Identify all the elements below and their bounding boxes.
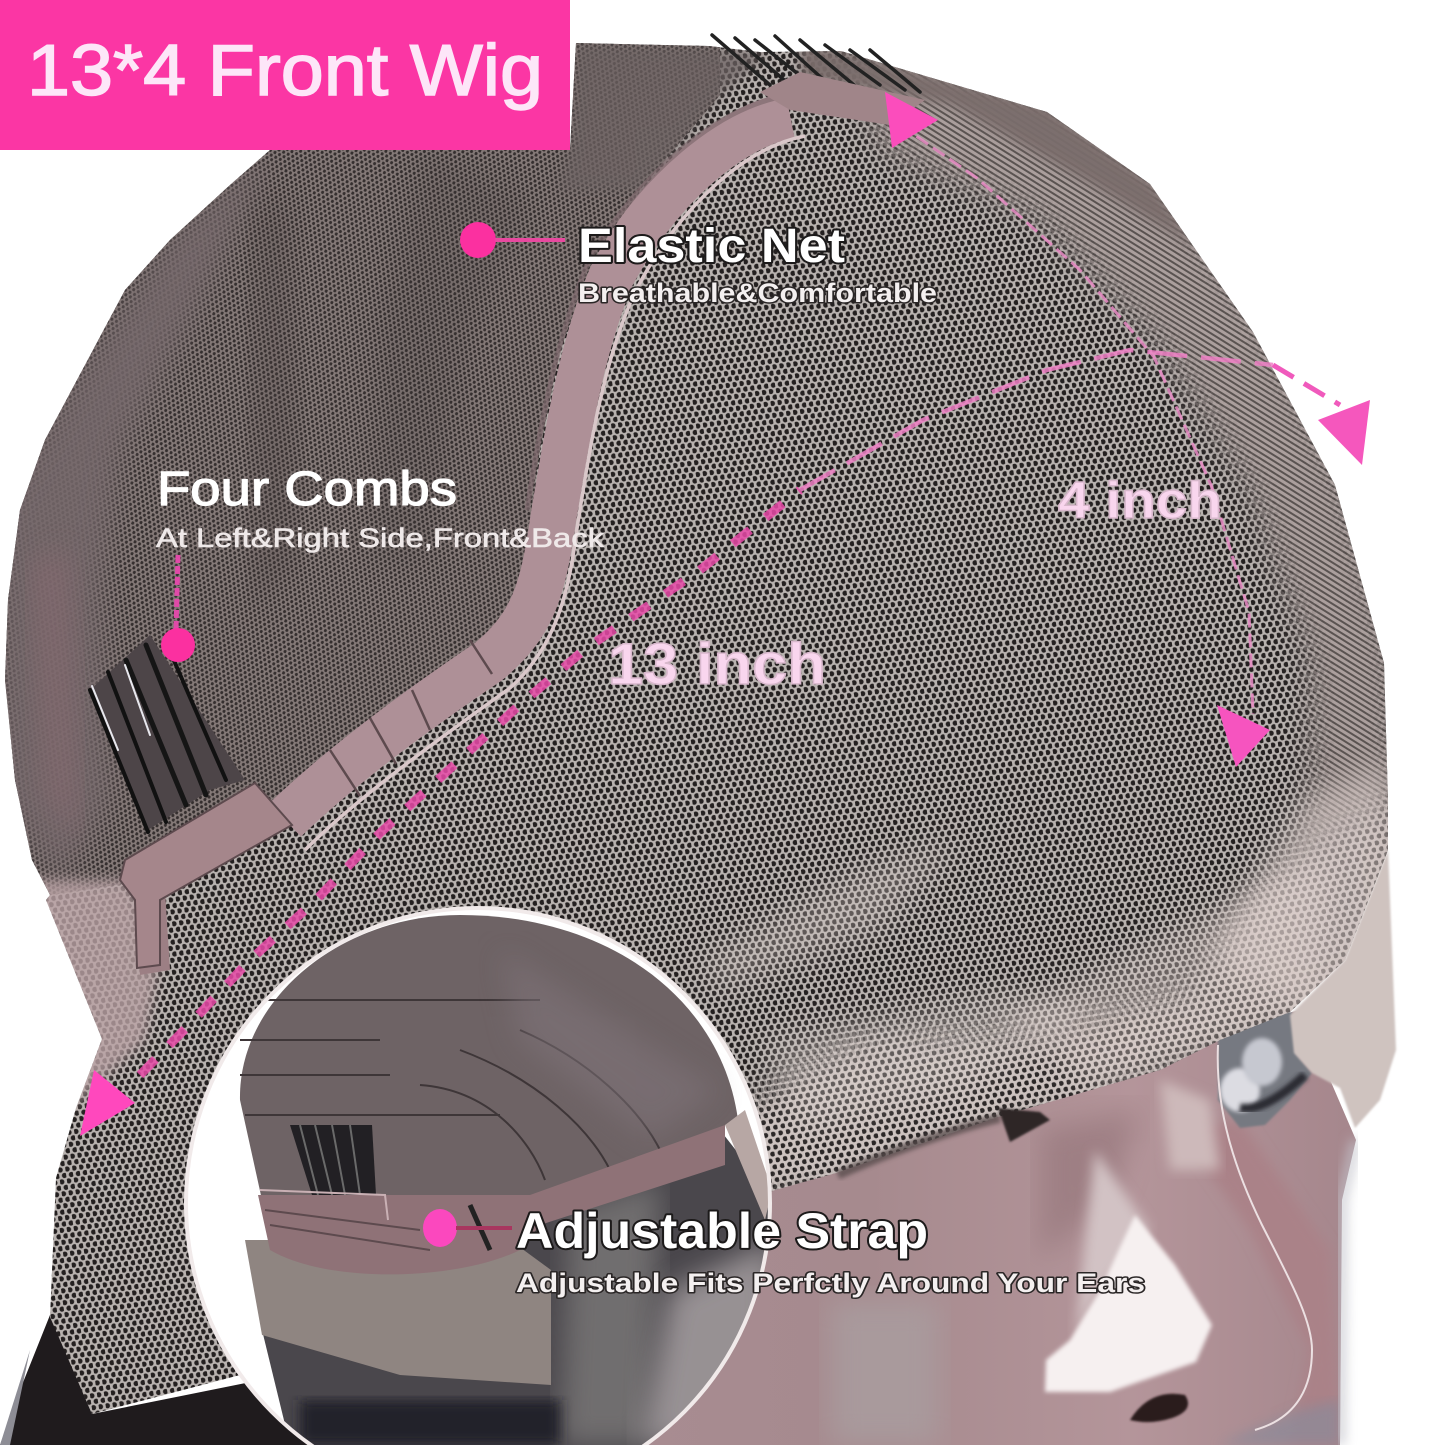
seam: ear tab — [120, 783, 292, 968]
face with nose and eye — [600, 1000, 1360, 1445]
arrow: 13 inch dashed measure — [80, 350, 1370, 1136]
cap: elastic net back — [0, 40, 720, 895]
callout: four combs — [156, 463, 605, 662]
arrowhead: 4 inch bottom — [1217, 705, 1270, 767]
inset circle: adjustable strap view — [186, 908, 775, 1445]
cap: lighter lace rim at right — [842, 52, 1388, 898]
hair at lower left — [0, 1315, 330, 1445]
arrowhead: 4 inch top — [885, 92, 938, 148]
inset: hair — [262, 1130, 775, 1445]
callout: four combs: At Left&Right Side,Front&Back — [156, 523, 605, 553]
title banner: 13*4 Front Wig — [27, 31, 543, 111]
callout: four combs: Four Combs — [157, 463, 457, 516]
arrow: 4 inch curved measure — [885, 92, 1270, 767]
label: 13 inch: 13 inch — [608, 632, 826, 697]
inset: lace patch — [245, 1240, 551, 1385]
inset: cap dome — [240, 915, 738, 1205]
icon: top comb — [712, 35, 925, 125]
nose speckled sheen — [1075, 1150, 1150, 1340]
inset: strap — [258, 1125, 725, 1274]
nose highlight — [1045, 1215, 1212, 1392]
seam: pink elastic band — [120, 96, 805, 968]
nose outline — [1218, 1045, 1312, 1430]
arrowhead: 13 inch right — [1318, 400, 1370, 465]
callout: elastic net: Elastic Net — [578, 220, 845, 273]
cap: lower left pink lace strip — [30, 880, 160, 1110]
inset: comb — [290, 1125, 376, 1195]
inset: lace flap — [725, 1110, 772, 1220]
closed eye lashes over lace edge — [838, 1108, 1050, 1175]
title banner — [0, 0, 570, 150]
callout: elastic net: Breathable&Comfortable — [578, 278, 937, 308]
callout: elastic net — [460, 220, 937, 308]
arrowhead: 13 inch left — [80, 1070, 135, 1136]
nostril — [1130, 1394, 1188, 1422]
icon: side comb — [90, 635, 245, 832]
eye — [1218, 1010, 1312, 1128]
callout: adjustable strap: Adjustable Strap — [516, 1203, 928, 1259]
label: 4 inch: 4 inch — [1058, 472, 1222, 530]
callout: adjustable strap: Adjustable Fits Perfctly Around Your Ears — [516, 1268, 1145, 1298]
pale lace flap at right — [1290, 850, 1396, 1128]
cap: pale front lace edge — [746, 784, 1388, 1192]
callout: adjustable strap — [423, 1203, 1145, 1298]
